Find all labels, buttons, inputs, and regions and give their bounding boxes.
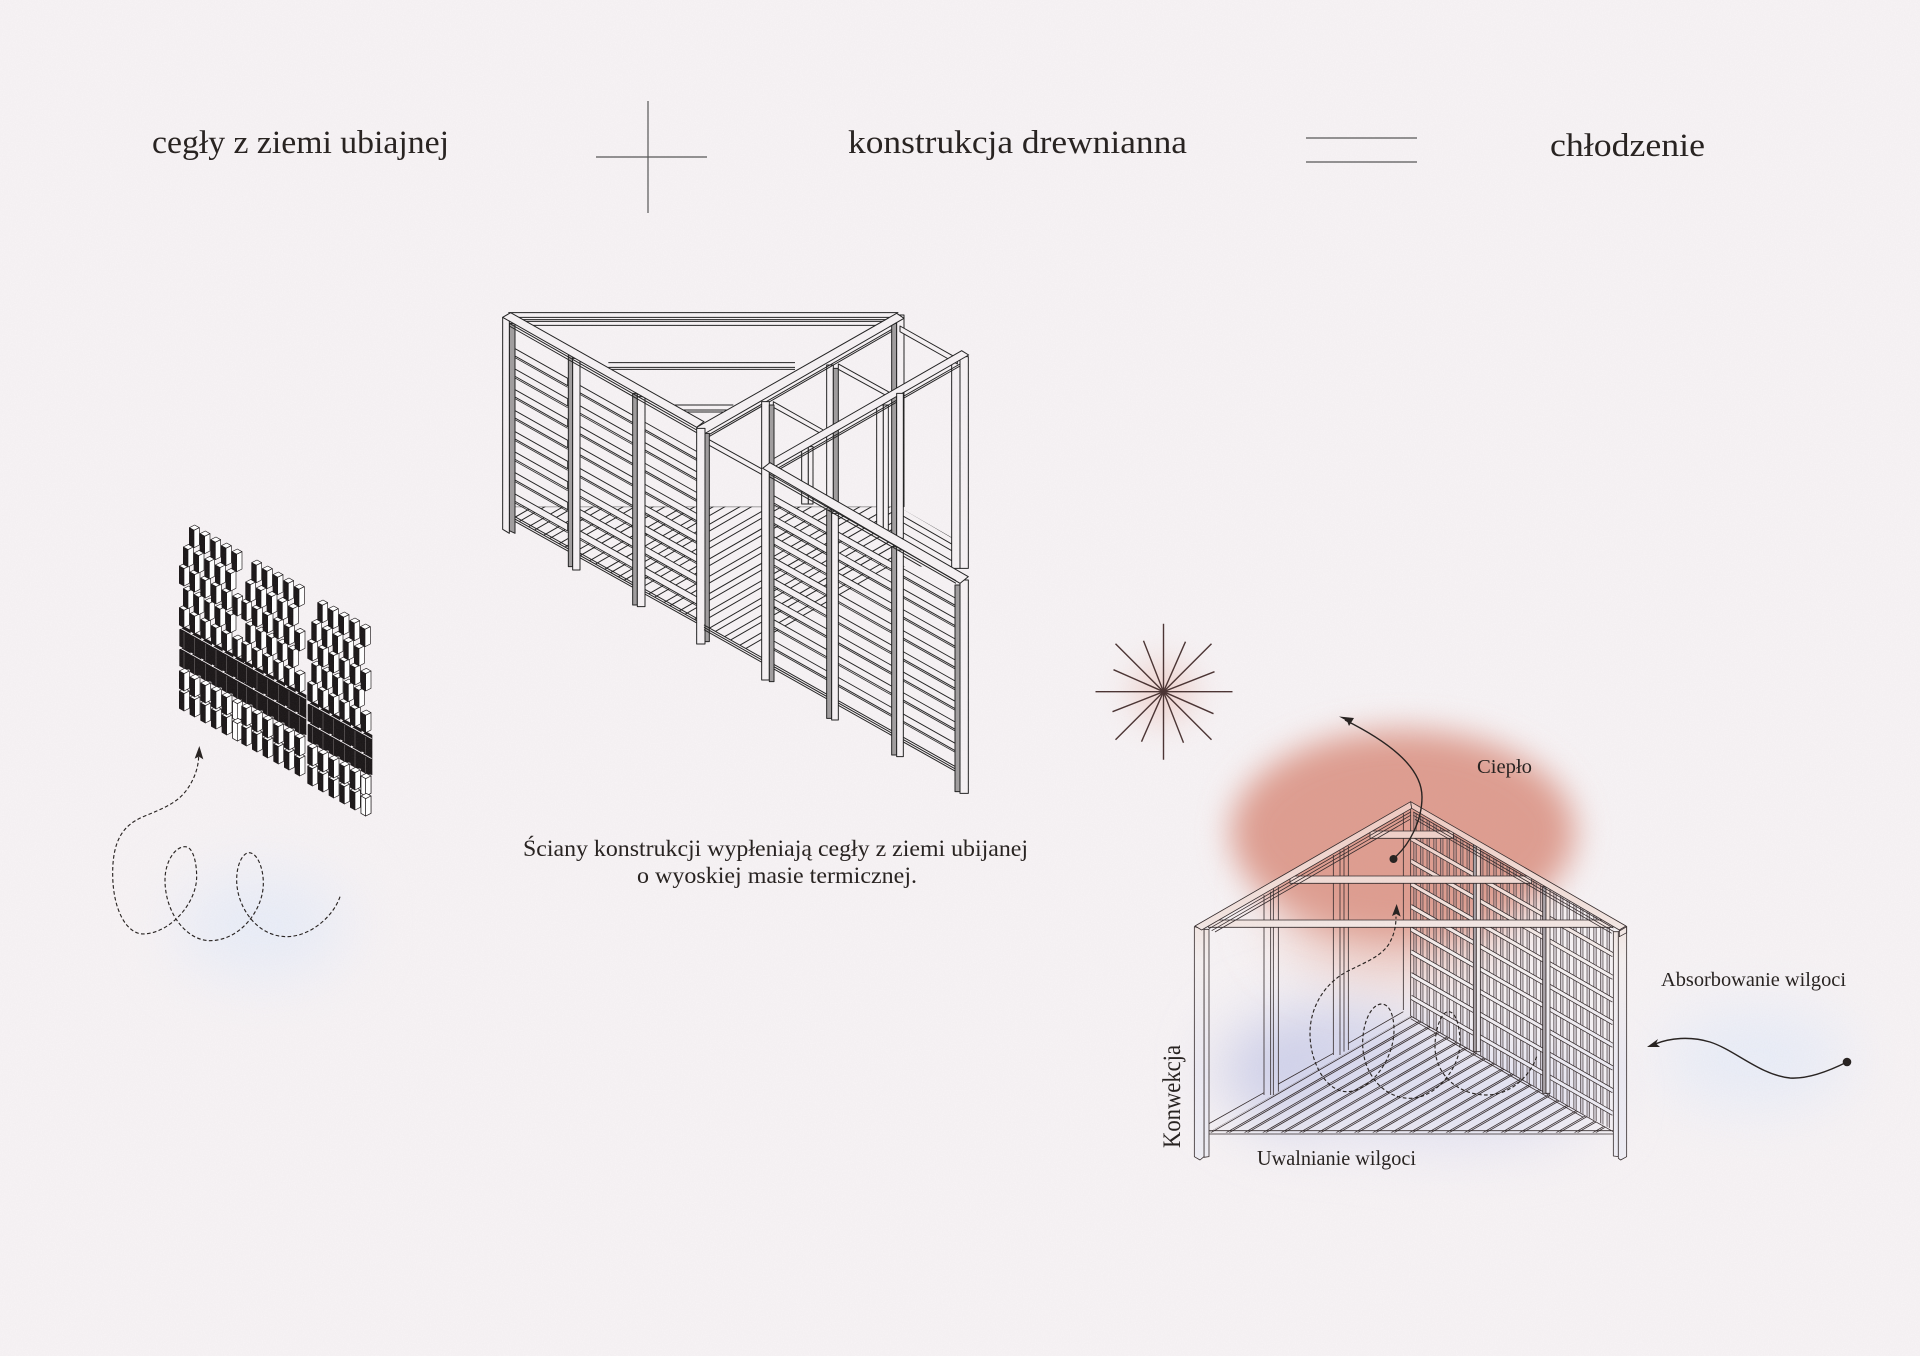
brick wall illustration with dashed arrow [113,525,372,941]
dashed convection arrow [1310,904,1537,1098]
floor boards right corner [904,510,952,567]
floor boards [516,506,894,648]
icon: equals sign [1306,138,1417,162]
left wall top beam [503,313,704,433]
lattice back wall [1411,800,1617,1133]
front wall posts [762,402,968,793]
header row [152,101,1705,213]
brick panel 1 [179,525,244,741]
heading: cooling: chłodzenie [1550,128,1705,164]
left wall slats bay 2 [573,381,633,570]
front wall slats bay 3 [897,565,957,753]
gradient blob: blue near moisture arrow [1660,1008,1850,1108]
front wall top beam [763,463,968,583]
back beams [508,313,898,412]
left back wall base lines [1208,1012,1403,1124]
brick panel 2 [242,560,306,776]
right corner post [1613,927,1627,1160]
heading: rammed earth bricks: cegły z ziemi ubiajnej [152,125,449,161]
caption [523,835,1028,888]
caption line 1: Ściany konstrukcji wypłeniają cegły z ziemi ubijanej [523,835,1028,861]
diagonal beam A [697,313,904,439]
side beams [707,326,957,475]
dashed spiral arrow [113,746,340,941]
left wall slats bay 3 [637,418,698,606]
left back wall posts [1264,808,1411,1095]
brick panel 3 [308,600,372,816]
interior posts [802,315,968,568]
label: convection: Konwekcja [1159,1045,1186,1148]
heat arrow [1339,716,1422,863]
right rafter [1411,802,1627,937]
label: moisture absorption: Absorbowanie wilgoci [1661,969,1846,991]
gradient blob: pink fade below heat [1280,840,1510,970]
front wall bottom rail [704,625,957,772]
gradient blob: lavender convection [1220,1008,1600,1143]
heading: timber construction: konstrukcja drewnianna [848,125,1187,161]
gradient blob: blue near brick spiral [177,873,347,977]
diagonal beam B [763,351,969,538]
front wall slats bay 1 [767,492,827,680]
gradient blob: red heat [1231,730,1575,934]
tie beams [1208,831,1612,927]
house section illustration [1194,800,1920,1160]
left wall slats bay 1 [507,344,568,533]
left wall posts [503,317,709,644]
timber frame illustration [502,312,970,794]
floor boards [1209,1016,1606,1133]
icon: sun star [1096,624,1232,760]
icon: plus sign [596,101,707,213]
left corner post [1194,927,1209,1160]
label: heat: Ciepło [1477,756,1532,778]
moisture absorption arrow [1647,1038,1851,1078]
label: moisture release: Uwalnianie wilgoci [1257,1146,1416,1170]
front wall slats bay 2 [832,529,893,717]
floor frame [1208,1016,1613,1134]
right wall posts [1473,845,1550,1093]
caption line 2: o wyoskiej masie termicznej. [637,863,917,888]
left rafter [1195,802,1412,932]
left wall rails [510,514,697,623]
gradient blob: star glow [1131,660,1195,724]
